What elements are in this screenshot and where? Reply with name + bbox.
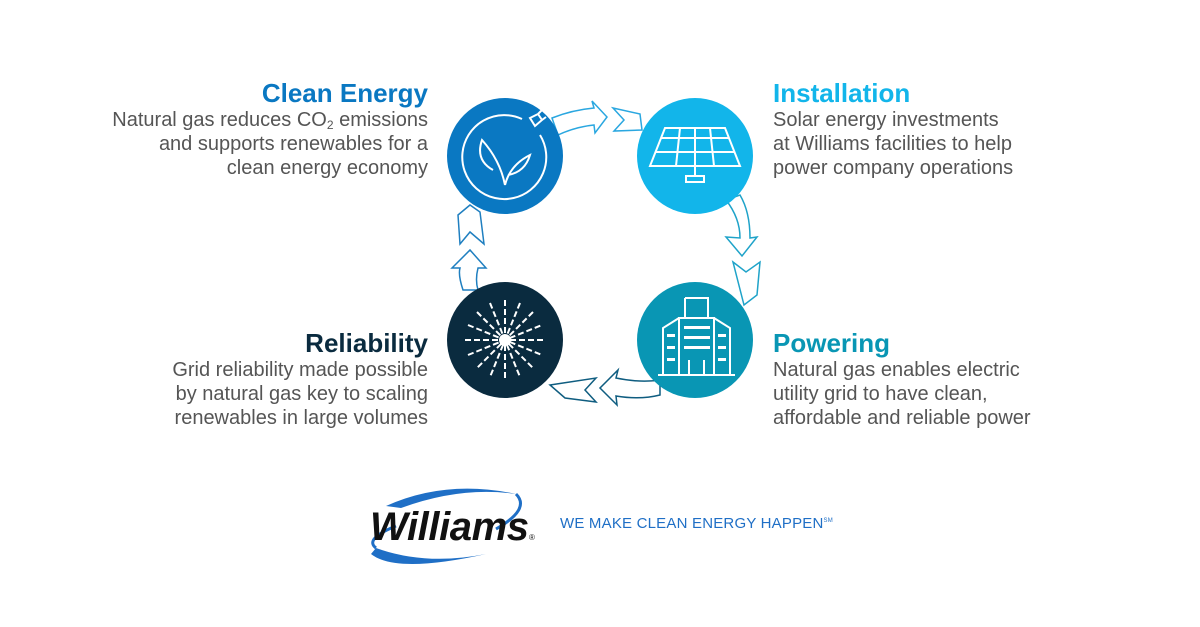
description: reliability: Grid reliability made possible [172, 359, 428, 381]
description: installation: power company operations [773, 157, 1013, 179]
arrow: left (reliability to clean energy) [452, 205, 486, 290]
text block: clean energy [112, 78, 428, 179]
logo: Williams: ® [529, 533, 535, 542]
description: installation: at Williams facilities to help [773, 133, 1012, 155]
description: clean energy [112, 109, 428, 179]
logo: Williams: Williams [370, 505, 528, 549]
description: powering: utility grid to have clean, [773, 383, 988, 405]
tagline: WE MAKE CLEAN ENERGY HAPPENSM [560, 515, 833, 532]
arrow: top (clean energy to installation) [552, 101, 642, 135]
description: clean energy: and supports renewables for a [159, 133, 428, 155]
text block: powering [773, 328, 1031, 429]
description: clean energy: clean energy economy [227, 157, 428, 179]
icon: reliability circle [447, 282, 563, 398]
icon: installation circle [637, 98, 753, 214]
arrow: bottom (powering to reliability) [550, 370, 660, 405]
description: clean energy: Natural gas reduces CO2 emissions [112, 109, 428, 132]
description: powering: affordable and reliable power [773, 407, 1031, 429]
icon: clean energy circle [447, 98, 563, 214]
arrow: right (installation to powering) [726, 195, 760, 305]
heading: reliability: Reliability [305, 328, 428, 358]
description: reliability [172, 359, 428, 429]
description: powering [773, 359, 1031, 429]
text block: reliability [172, 328, 428, 429]
heading: clean energy: Clean Energy [262, 78, 428, 108]
icon: powering circle [637, 282, 753, 398]
heading: installation: Installation [773, 78, 910, 108]
text block: installation [773, 78, 1013, 179]
logo: Williams [370, 488, 535, 564]
description: installation: Solar energy investments [773, 109, 999, 131]
description: installation [773, 109, 1013, 179]
heading: powering: Powering [773, 328, 890, 358]
description: reliability: renewables in large volumes [175, 407, 428, 429]
description: powering: Natural gas enables electric [773, 359, 1020, 381]
description: reliability: by natural gas key to scaling [176, 383, 428, 405]
